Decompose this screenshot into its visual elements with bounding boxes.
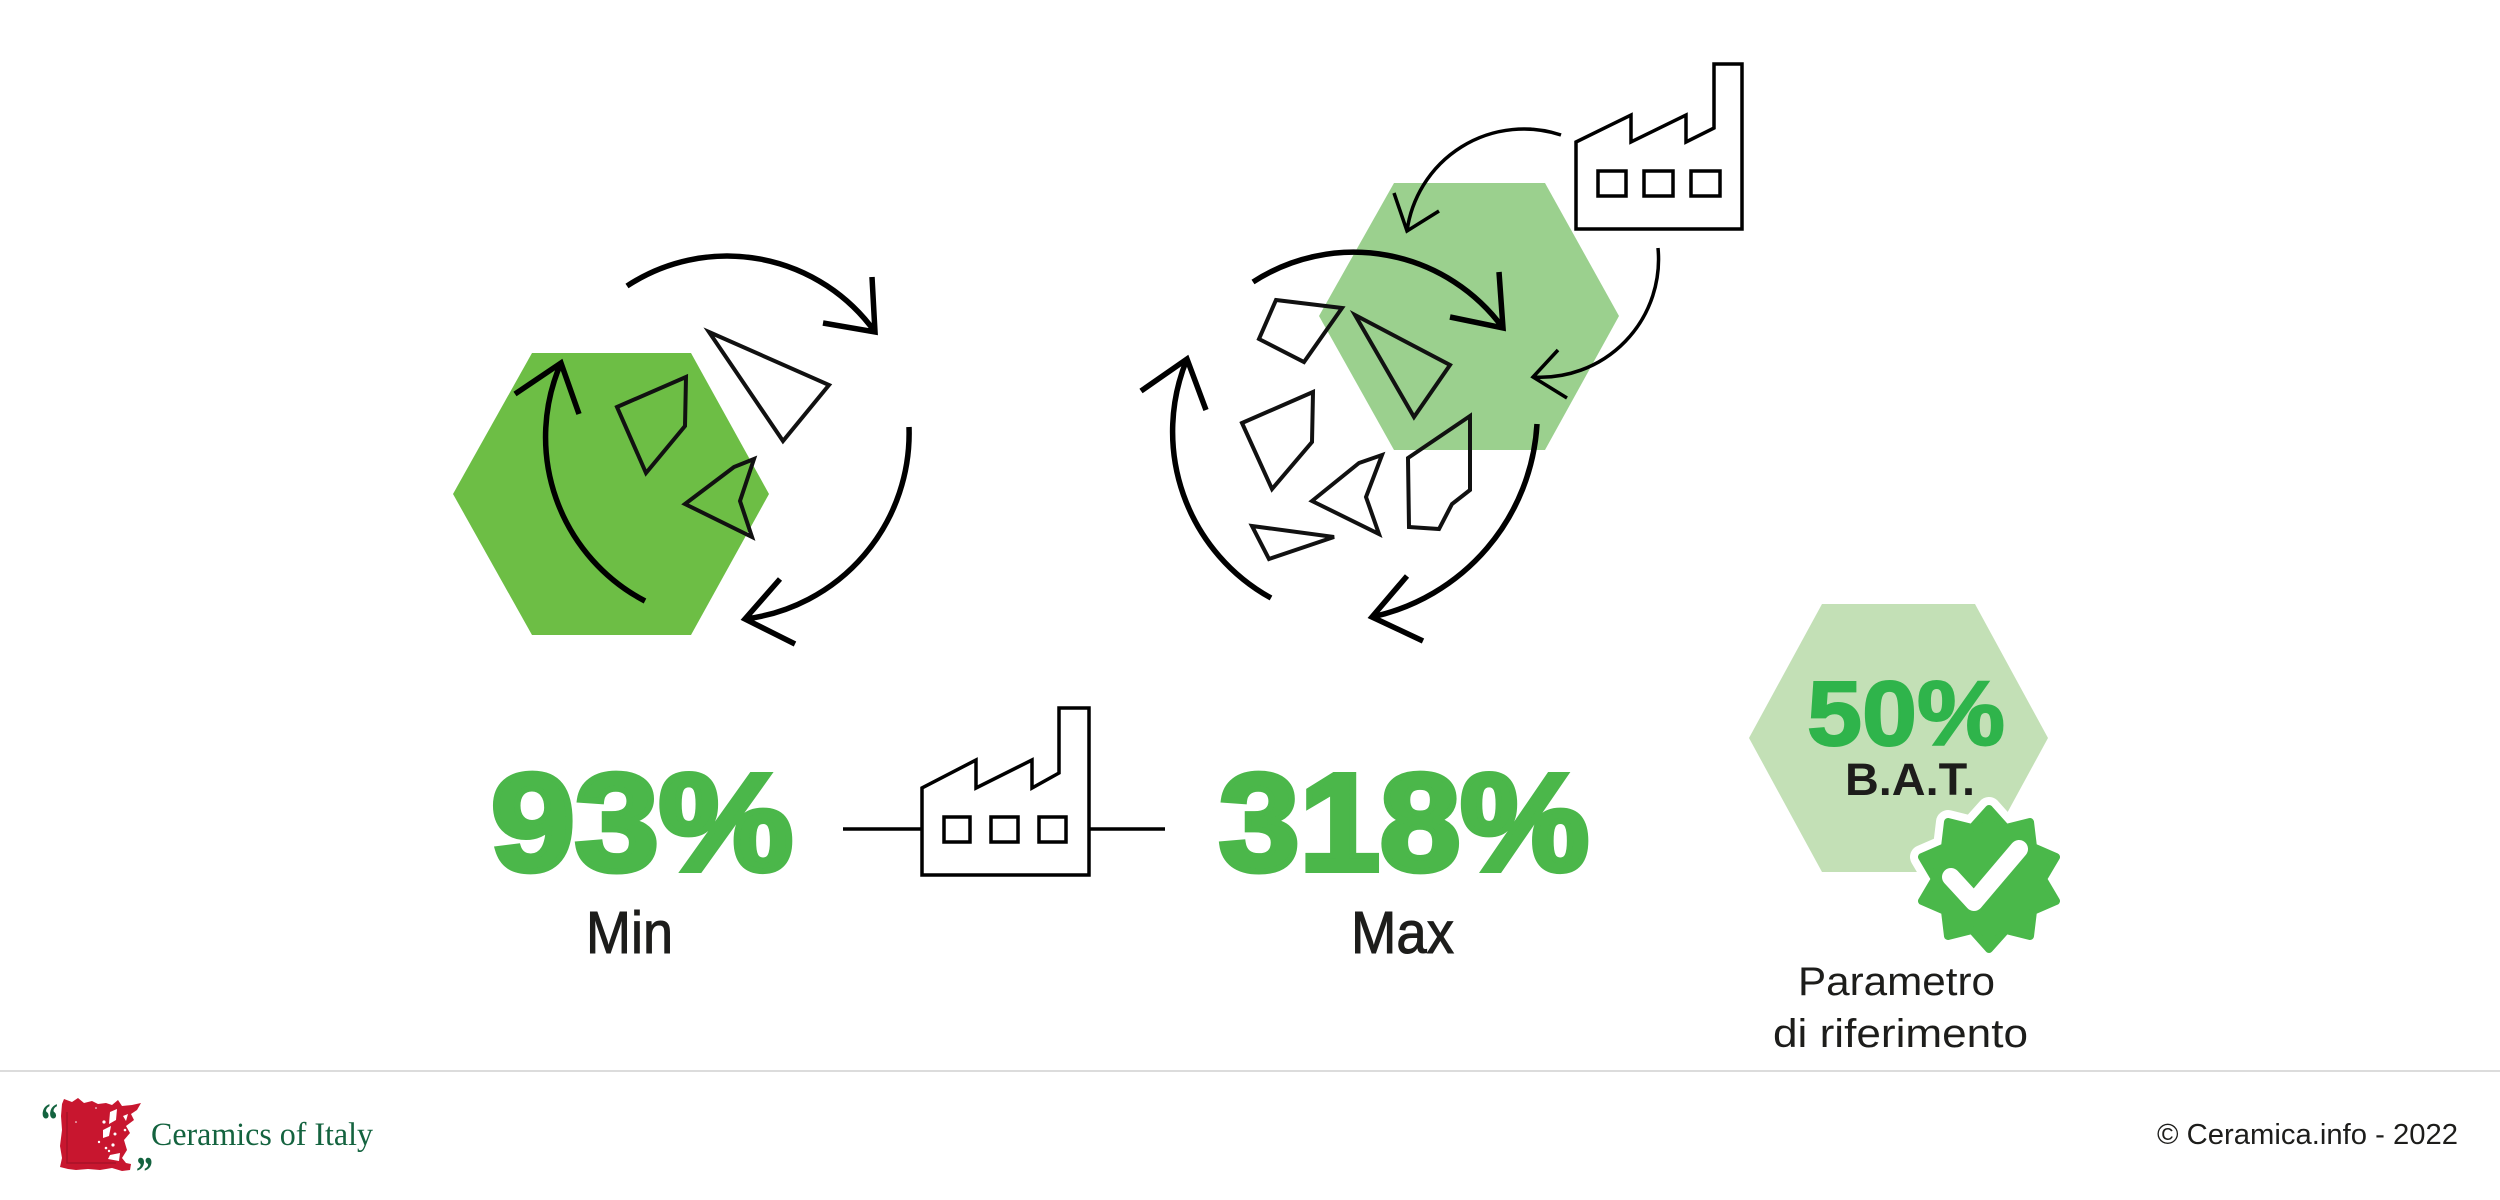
label: Min: Min <box>586 900 673 966</box>
value: 93%: 93% <box>491 746 793 900</box>
stat: 318% max <box>1219 746 1589 966</box>
value: 318%: 318% <box>1219 746 1589 900</box>
arrow: factory to hexagon <box>1394 129 1561 231</box>
fragment: pentagon <box>617 377 686 473</box>
logo: Ceramics of Italy <box>41 1094 373 1196</box>
arrow: cycle left <box>1141 359 1271 598</box>
hexagon: dark green <box>453 353 769 635</box>
panel: B.A.T. reference <box>1749 604 2056 1056</box>
arrow: left <box>515 363 645 601</box>
arrow: factory to hexagon lower <box>1533 248 1659 398</box>
icon: factory with connecting lines <box>843 708 1165 875</box>
value: 50%: 50% <box>1807 663 2005 765</box>
fragment 3 <box>1242 392 1313 489</box>
caption: Parametro di riferimento <box>1773 960 2028 1056</box>
fragment 2 <box>1355 315 1450 417</box>
logo wordmark: Ceramics of Italy <box>151 1117 373 1153</box>
arrow: right <box>745 427 909 644</box>
hexagon: light green <box>1749 604 2048 872</box>
fragment 1 <box>1259 300 1342 362</box>
label: Max: Max <box>1351 900 1454 966</box>
label: B.A.T.: B.A.T. <box>1845 754 1975 805</box>
caption: Parametro di riferimento: di riferimento <box>1773 1012 2028 1056</box>
fragment: arrowhead shard <box>685 459 754 537</box>
arrow: cycle top <box>1253 252 1503 328</box>
logo mark: red brush square <box>60 1098 141 1171</box>
stat: 93% min <box>491 746 793 966</box>
logo quotes: “ <box>41 1094 58 1147</box>
icon: factory <box>1576 64 1742 229</box>
arrow: top <box>627 256 875 332</box>
logo quotes: ” <box>136 1150 153 1196</box>
icon: check badge <box>1922 809 2056 949</box>
arrow: cycle right <box>1372 424 1537 641</box>
hexagon: medium green <box>1319 183 1619 450</box>
copyright: © Ceramica.info - 2022 <box>2157 1119 2458 1151</box>
fragment 6 <box>1252 526 1334 559</box>
fragment 5 <box>1408 416 1470 529</box>
logo quotes <box>41 1094 153 1196</box>
panel: min recycling cycle <box>453 256 909 644</box>
fragment: triangle <box>709 332 829 441</box>
caption: Parametro di riferimento: Parametro <box>1798 960 1995 1004</box>
footer divider <box>0 1070 2500 1072</box>
panel: max recycling cycle <box>1141 64 1742 641</box>
fragment 4 <box>1312 455 1382 534</box>
